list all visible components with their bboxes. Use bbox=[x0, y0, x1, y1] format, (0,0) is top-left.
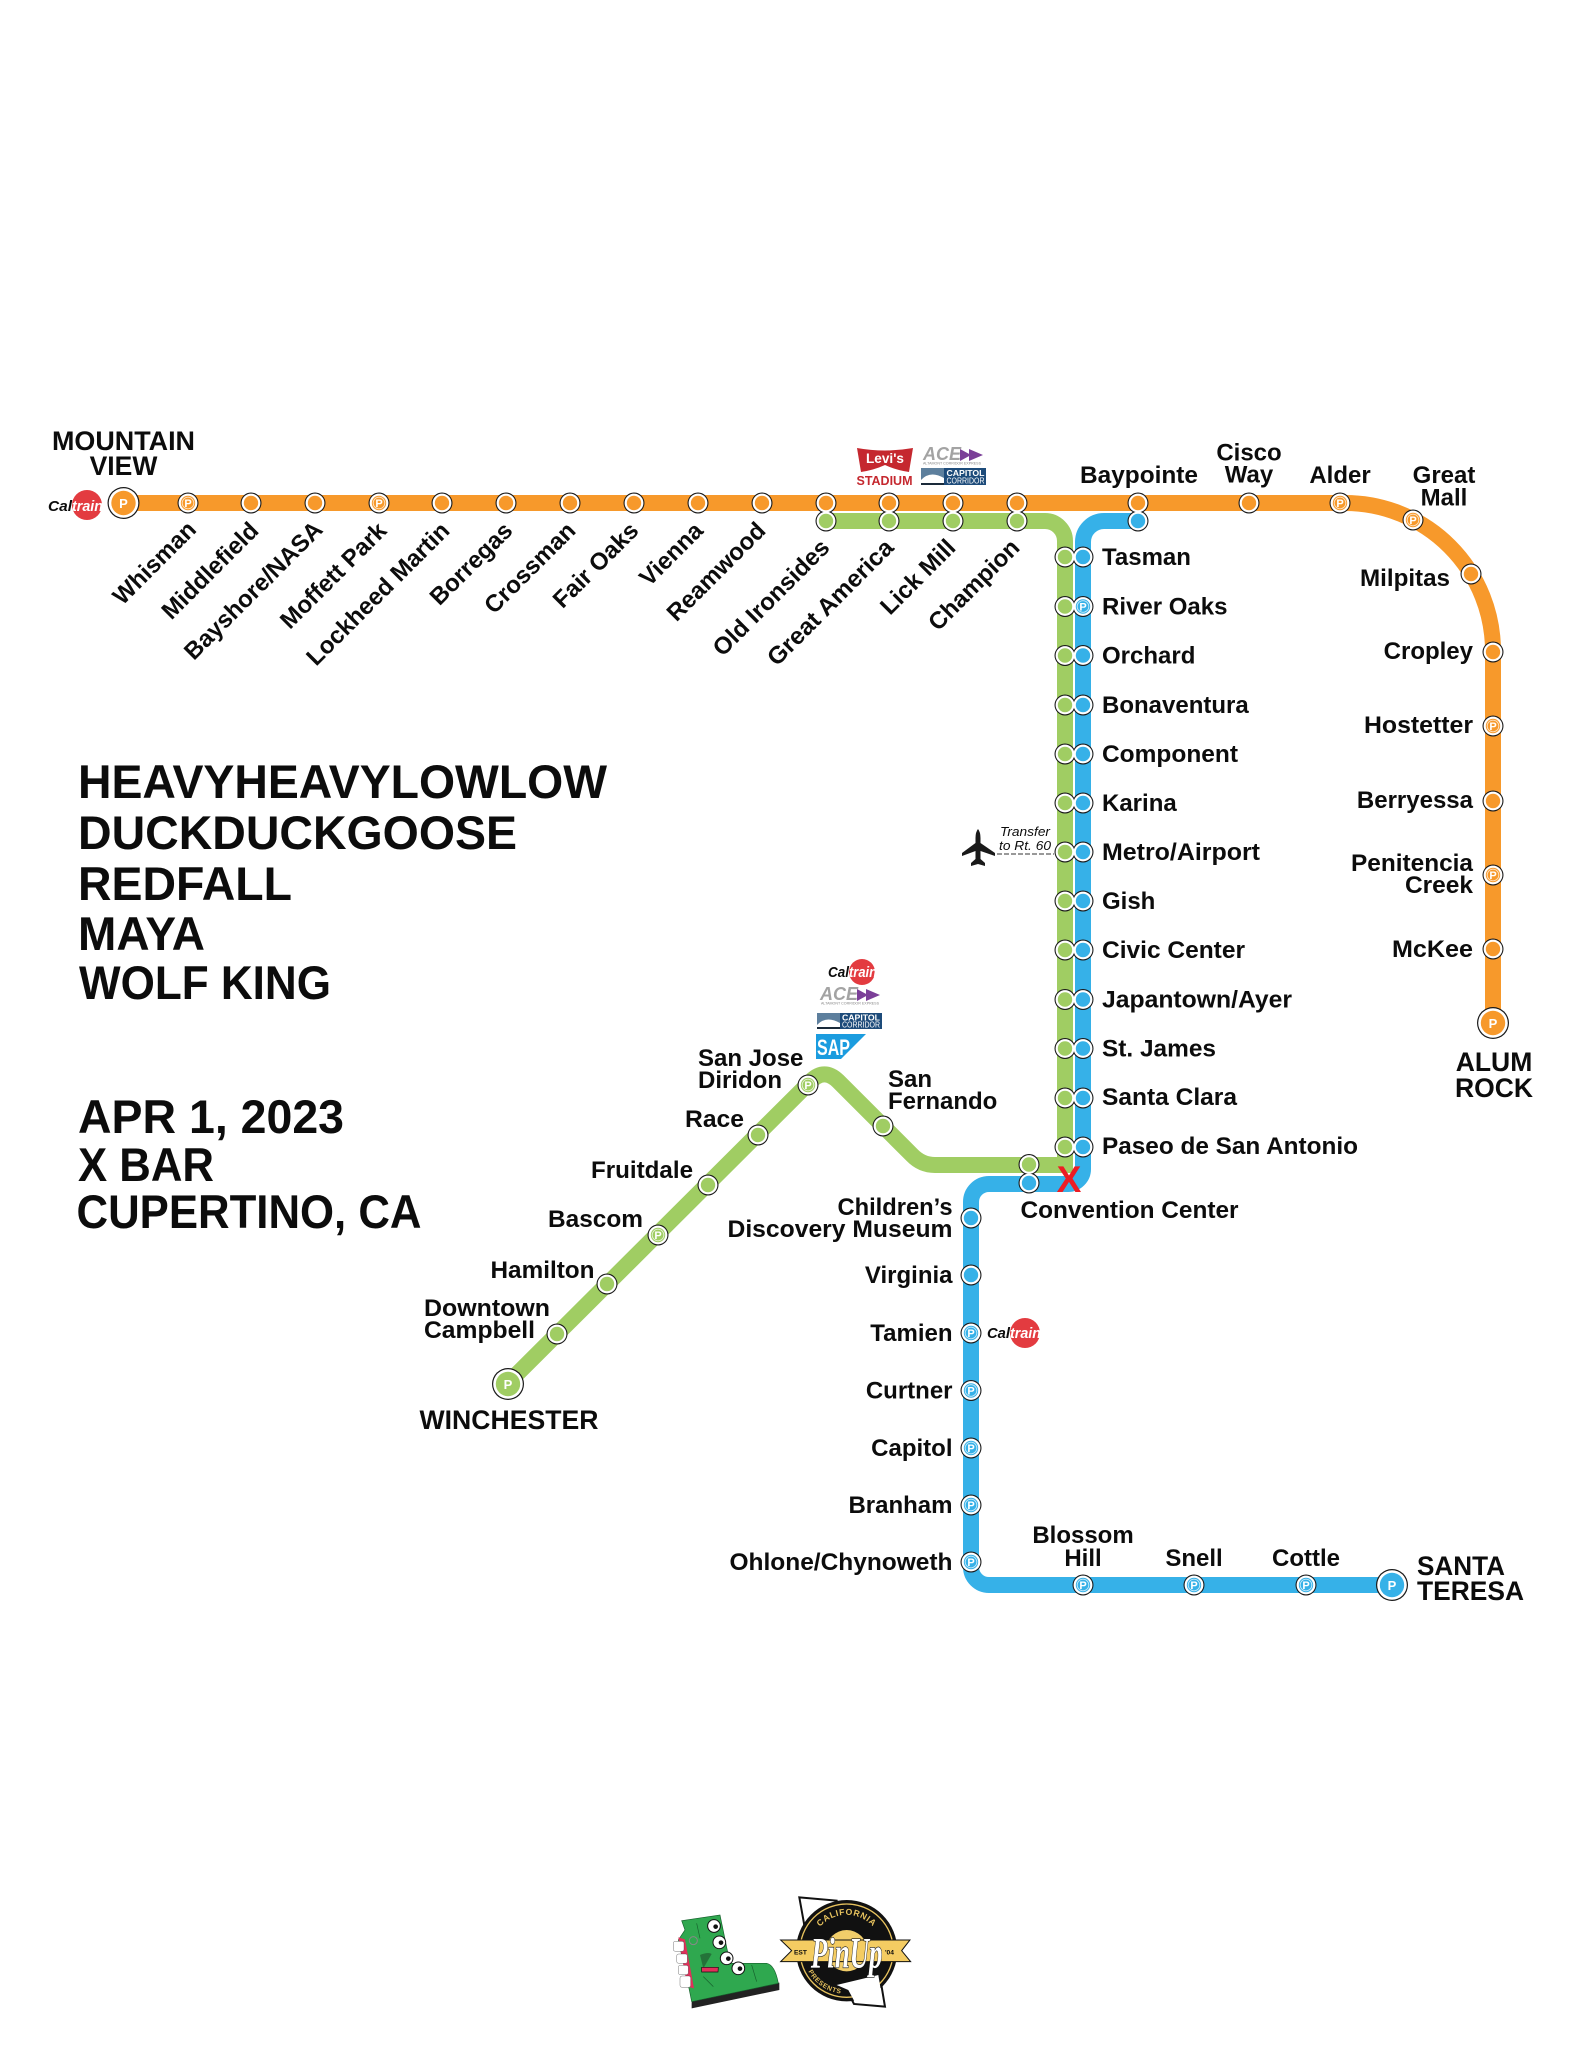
transfer note: airplane and Rt. 60: Transfer bbox=[1000, 824, 1051, 839]
logo: Capitol Corridor: CORRIDOR bbox=[946, 476, 985, 486]
logo: Capitol Corridor at Diridon: CAPITOL bbox=[842, 1012, 880, 1022]
text block: date and venue: X BAR bbox=[78, 1138, 214, 1191]
text block: band lineup: DUCKDUCKGOOSE bbox=[78, 806, 517, 859]
line: green route bbox=[507, 521, 1065, 1384]
terminal station: Winchester bbox=[420, 1368, 598, 1435]
station: Snell: P bbox=[1190, 1580, 1198, 1592]
station: Cisco Way bbox=[1216, 440, 1282, 514]
station: San Jose Diridon: Diridon bbox=[698, 1067, 782, 1094]
station pair: Component: Component bbox=[1102, 741, 1238, 768]
station: McKee: McKee bbox=[1392, 936, 1473, 963]
station: Curtner: Curtner bbox=[866, 1378, 952, 1404]
terminal station: Mountain View bbox=[108, 487, 140, 519]
station pair: Lick Mill: Lick Mill bbox=[875, 534, 961, 620]
terminal station: Alum Rock: ALUM bbox=[1456, 1047, 1532, 1077]
station: Alder bbox=[1309, 462, 1371, 514]
logo: California Pin-Up Presents: CALIFORNIA bbox=[817, 1908, 876, 1926]
station: Cottle: P bbox=[1302, 1580, 1310, 1592]
station: Race bbox=[685, 1106, 768, 1146]
station: Fruitdale: Fruitdale bbox=[591, 1157, 693, 1184]
station pair: St. James: St. James bbox=[1102, 1036, 1216, 1062]
station: Children's Discovery Museum: Children’s bbox=[838, 1194, 952, 1221]
icon: Caltrain logo at Mountain View bbox=[48, 490, 103, 520]
logo: Caltrain at Diridon bbox=[828, 959, 877, 985]
line: orange route bbox=[123, 503, 1493, 1023]
logo: Caltrain at Diridon: train bbox=[849, 964, 877, 981]
station: Borregas: Borregas bbox=[425, 517, 518, 611]
station pair: Old Ironsides: Old Ironsides bbox=[708, 534, 835, 662]
text block: band lineup: MAYA bbox=[78, 907, 205, 960]
station: Children's Discovery Museum bbox=[728, 1194, 982, 1243]
terminal station: Mountain View: P bbox=[119, 496, 128, 511]
logo: California Pin-Up Presents bbox=[780, 1896, 912, 2008]
station: Hamilton bbox=[490, 1257, 618, 1294]
station: Ohlone/Chynoweth: Ohlone/Chynoweth bbox=[730, 1549, 952, 1576]
text block: band lineup: HEAVYHEAVYLOWLOW bbox=[78, 755, 608, 808]
station: Penitencia Creek: Creek bbox=[1405, 872, 1474, 899]
station pair: St. James bbox=[1054, 1036, 1216, 1062]
station: Milpitas bbox=[1360, 564, 1482, 592]
station: Bascom bbox=[548, 1206, 668, 1246]
logo: California Pin-Up Presents: PRESENTS bbox=[808, 1969, 841, 1994]
text block: band lineup: REDFALL bbox=[78, 857, 292, 910]
station: Blossom Hill: P bbox=[1079, 1580, 1087, 1592]
terminal station: Santa Teresa bbox=[1376, 1551, 1524, 1606]
text block: date and venue bbox=[76, 1090, 422, 1238]
station pair: Great America: Great America bbox=[762, 534, 900, 671]
marker: red X: X bbox=[1057, 1159, 1082, 1200]
station: Great Mall bbox=[1402, 462, 1475, 530]
terminal station: Santa Teresa: SANTA bbox=[1417, 1551, 1505, 1581]
station: Fair Oaks: Fair Oaks bbox=[548, 517, 644, 614]
logo: ACE: ACE bbox=[922, 444, 962, 464]
station pair: Karina bbox=[1054, 790, 1177, 817]
station: Blossom Hill: Hill bbox=[1064, 1545, 1102, 1572]
station pair: Bonaventura: Bonaventura bbox=[1102, 692, 1249, 719]
station: San Fernando: Fernando bbox=[888, 1088, 997, 1115]
station: Cottle: Cottle bbox=[1272, 1545, 1340, 1572]
logo: Levi's Stadium bbox=[856, 448, 913, 488]
station: Great Mall: P bbox=[1409, 515, 1417, 527]
logo: green boot monster bbox=[673, 1915, 779, 2008]
station pair: Paseo de San Antonio: Paseo de San Antonio bbox=[1102, 1133, 1358, 1160]
transfer note: airplane and Rt. 60 bbox=[962, 824, 1054, 866]
station: Penitencia Creek: Penitencia bbox=[1351, 850, 1474, 877]
logo: Capitol Corridor at Diridon bbox=[817, 1012, 882, 1030]
terminal station: Santa Teresa: P bbox=[1388, 1578, 1397, 1593]
station: Lockheed Martin: Lockheed Martin bbox=[301, 517, 455, 671]
station: Alder: P bbox=[1336, 498, 1344, 510]
station: Bayshore/NASA: Bayshore/NASA bbox=[179, 516, 328, 665]
station: Moffett Park: Moffett Park bbox=[275, 517, 393, 634]
station: San Fernando bbox=[872, 1066, 997, 1136]
logo: California Pin-Up Presents: PinUp bbox=[810, 1929, 882, 1977]
station: Blossom Hill: Blossom bbox=[1032, 1522, 1134, 1549]
station: Whisman: Whisman bbox=[108, 516, 202, 610]
station: Downtown Campbell: Campbell bbox=[424, 1317, 535, 1344]
station: Branham: Branham bbox=[848, 1492, 952, 1519]
station pair: Tasman bbox=[1054, 544, 1191, 571]
station: Snell bbox=[1165, 1545, 1223, 1596]
station: Tamien: Tamien bbox=[870, 1320, 952, 1347]
station pair: River Oaks: P bbox=[1079, 602, 1087, 614]
station: Milpitas: Milpitas bbox=[1360, 565, 1450, 592]
transfer note: airplane and Rt. 60: to Rt. 60 bbox=[999, 838, 1052, 853]
station: Capitol: Capitol bbox=[871, 1435, 952, 1462]
station: Downtown Campbell bbox=[424, 1295, 568, 1344]
station pair: Gish bbox=[1054, 888, 1155, 915]
station: Ohlone/Chynoweth: P bbox=[967, 1557, 975, 1569]
logo: ACE bbox=[922, 444, 983, 466]
station: Middlefield: Middlefield bbox=[157, 517, 264, 625]
station: San Fernando: San bbox=[888, 1066, 932, 1093]
text block: date and venue: APR 1, 2023 bbox=[78, 1090, 344, 1143]
station: Race: Race bbox=[685, 1106, 744, 1133]
logo: Capitol Corridor bbox=[921, 468, 986, 486]
station: Crossman: Crossman bbox=[479, 517, 581, 619]
logo: Levi's Stadium: STADIUM bbox=[856, 473, 912, 488]
station: Berryessa: Berryessa bbox=[1357, 787, 1474, 814]
label: Mountain View terminal name: MOUNTAIN bbox=[52, 426, 195, 456]
icon: Caltrain logo at Tamien: train bbox=[1010, 1325, 1041, 1342]
station pair: Karina: Karina bbox=[1102, 790, 1177, 817]
terminal station: Winchester: WINCHESTER bbox=[420, 1405, 598, 1435]
station: Cisco Way: Cisco bbox=[1216, 440, 1282, 466]
station: Great Mall: Great bbox=[1413, 462, 1475, 489]
station: Blossom Hill bbox=[1032, 1522, 1134, 1596]
station: Children's Discovery Museum: Discovery Museum bbox=[728, 1216, 952, 1243]
station: Virginia: Virginia bbox=[865, 1262, 953, 1289]
icon: Caltrain logo at Tamien bbox=[987, 1318, 1041, 1348]
station: Cropley: Cropley bbox=[1384, 638, 1474, 665]
text block: band lineup bbox=[78, 755, 608, 1009]
terminal station: Alum Rock bbox=[1455, 1007, 1533, 1103]
station: Cisco Way: Way bbox=[1225, 462, 1274, 488]
station: San Jose Diridon bbox=[698, 1045, 818, 1096]
logo: ACE: ALTAMONT CORRIDOR EXPRESS bbox=[923, 462, 982, 466]
label: Mountain View terminal name: VIEW bbox=[90, 451, 157, 481]
station pair: Champion bbox=[923, 492, 1028, 636]
station: Hostetter: Hostetter bbox=[1364, 712, 1473, 739]
station: Hostetter: P bbox=[1489, 721, 1497, 733]
terminal station: Santa Teresa: TERESA bbox=[1417, 1576, 1524, 1606]
station pair: Baypointe: Baypointe bbox=[1080, 462, 1198, 489]
station: Moffett Park: P bbox=[375, 498, 383, 510]
station: Snell: Snell bbox=[1165, 1545, 1223, 1572]
logo: SAP: SAP bbox=[817, 1035, 850, 1060]
station pair: Metro/Airport: Metro/Airport bbox=[1102, 839, 1260, 866]
logo: California Pin-Up Presents: '04 bbox=[885, 1950, 894, 1957]
station: Penitencia Creek bbox=[1351, 850, 1504, 899]
logo: ACE at Diridon: ALTAMONT CORRIDOR EXPRESS bbox=[821, 1002, 880, 1006]
terminal station: Winchester: P bbox=[504, 1377, 513, 1392]
station pair: Lick Mill bbox=[875, 492, 964, 620]
station: Alder: Alder bbox=[1309, 462, 1371, 489]
station: Reamwood: Reamwood bbox=[662, 517, 771, 627]
terminal station: Alum Rock: P bbox=[1489, 1016, 1498, 1031]
station: Cottle bbox=[1272, 1545, 1340, 1596]
station: McKee bbox=[1392, 936, 1504, 963]
logo: Capitol Corridor at Diridon: CORRIDOR bbox=[842, 1020, 880, 1030]
station: Hamilton: Hamilton bbox=[490, 1257, 594, 1284]
station: Penitencia Creek: P bbox=[1489, 870, 1497, 882]
station: Bascom: Bascom bbox=[548, 1206, 643, 1233]
station pair: Champion: Champion bbox=[923, 534, 1025, 636]
icon: Caltrain logo at Tamien: Cal bbox=[987, 1325, 1011, 1342]
station: Whisman: P bbox=[184, 498, 192, 510]
station pair: Tasman: Tasman bbox=[1102, 544, 1191, 571]
station: San Jose Diridon: P bbox=[804, 1080, 812, 1092]
station: Vienna: Vienna bbox=[634, 517, 709, 592]
logo: ACE at Diridon bbox=[819, 984, 880, 1006]
station pair: Gish: Gish bbox=[1102, 888, 1155, 915]
station: Curtner: P bbox=[967, 1386, 975, 1398]
label: Mountain View terminal name bbox=[52, 426, 195, 481]
logo: California Pin-Up Presents: EST bbox=[794, 1950, 807, 1957]
station pair: Japantown/Ayer: Japantown/Ayer bbox=[1102, 986, 1292, 1014]
station pair: Civic Center: Civic Center bbox=[1102, 937, 1245, 964]
station: Bascom: P bbox=[654, 1230, 662, 1242]
icon: Caltrain logo at Mountain View: train bbox=[72, 498, 103, 515]
station: Fruitdale bbox=[591, 1157, 718, 1196]
logo: ACE at Diridon: ACE bbox=[819, 984, 859, 1004]
logo: Caltrain at Diridon: Cal bbox=[828, 964, 850, 981]
station pair: Santa Clara: Santa Clara bbox=[1102, 1084, 1238, 1111]
station: Capitol: P bbox=[967, 1443, 975, 1455]
station: Great Mall: Mall bbox=[1421, 484, 1467, 512]
station pair: Baypointe bbox=[1080, 462, 1198, 532]
logo: Levi's Stadium: Levi's bbox=[866, 450, 904, 466]
icon: Caltrain logo at Mountain View: Cal bbox=[48, 498, 73, 515]
station pair: Orchard: Orchard bbox=[1102, 642, 1195, 670]
station: Tamien: P bbox=[967, 1328, 975, 1340]
line: blue route bbox=[971, 521, 1391, 1585]
station pair: River Oaks: River Oaks bbox=[1102, 594, 1227, 620]
station pair: Convention Center bbox=[1018, 1154, 1238, 1224]
station: San Jose Diridon: San Jose bbox=[698, 1045, 803, 1072]
terminal station: Alum Rock: ROCK bbox=[1455, 1073, 1533, 1103]
text block: band lineup: WOLF KING bbox=[79, 956, 331, 1009]
text block: date and venue: CUPERTINO, CA bbox=[76, 1185, 422, 1238]
station pair: Convention Center: Convention Center bbox=[1020, 1197, 1238, 1224]
logo: Capitol Corridor: CAPITOL bbox=[946, 468, 984, 478]
station pair: Orchard bbox=[1054, 642, 1195, 670]
station: Downtown Campbell: Downtown bbox=[424, 1295, 550, 1322]
station: Branham: P bbox=[967, 1500, 975, 1512]
